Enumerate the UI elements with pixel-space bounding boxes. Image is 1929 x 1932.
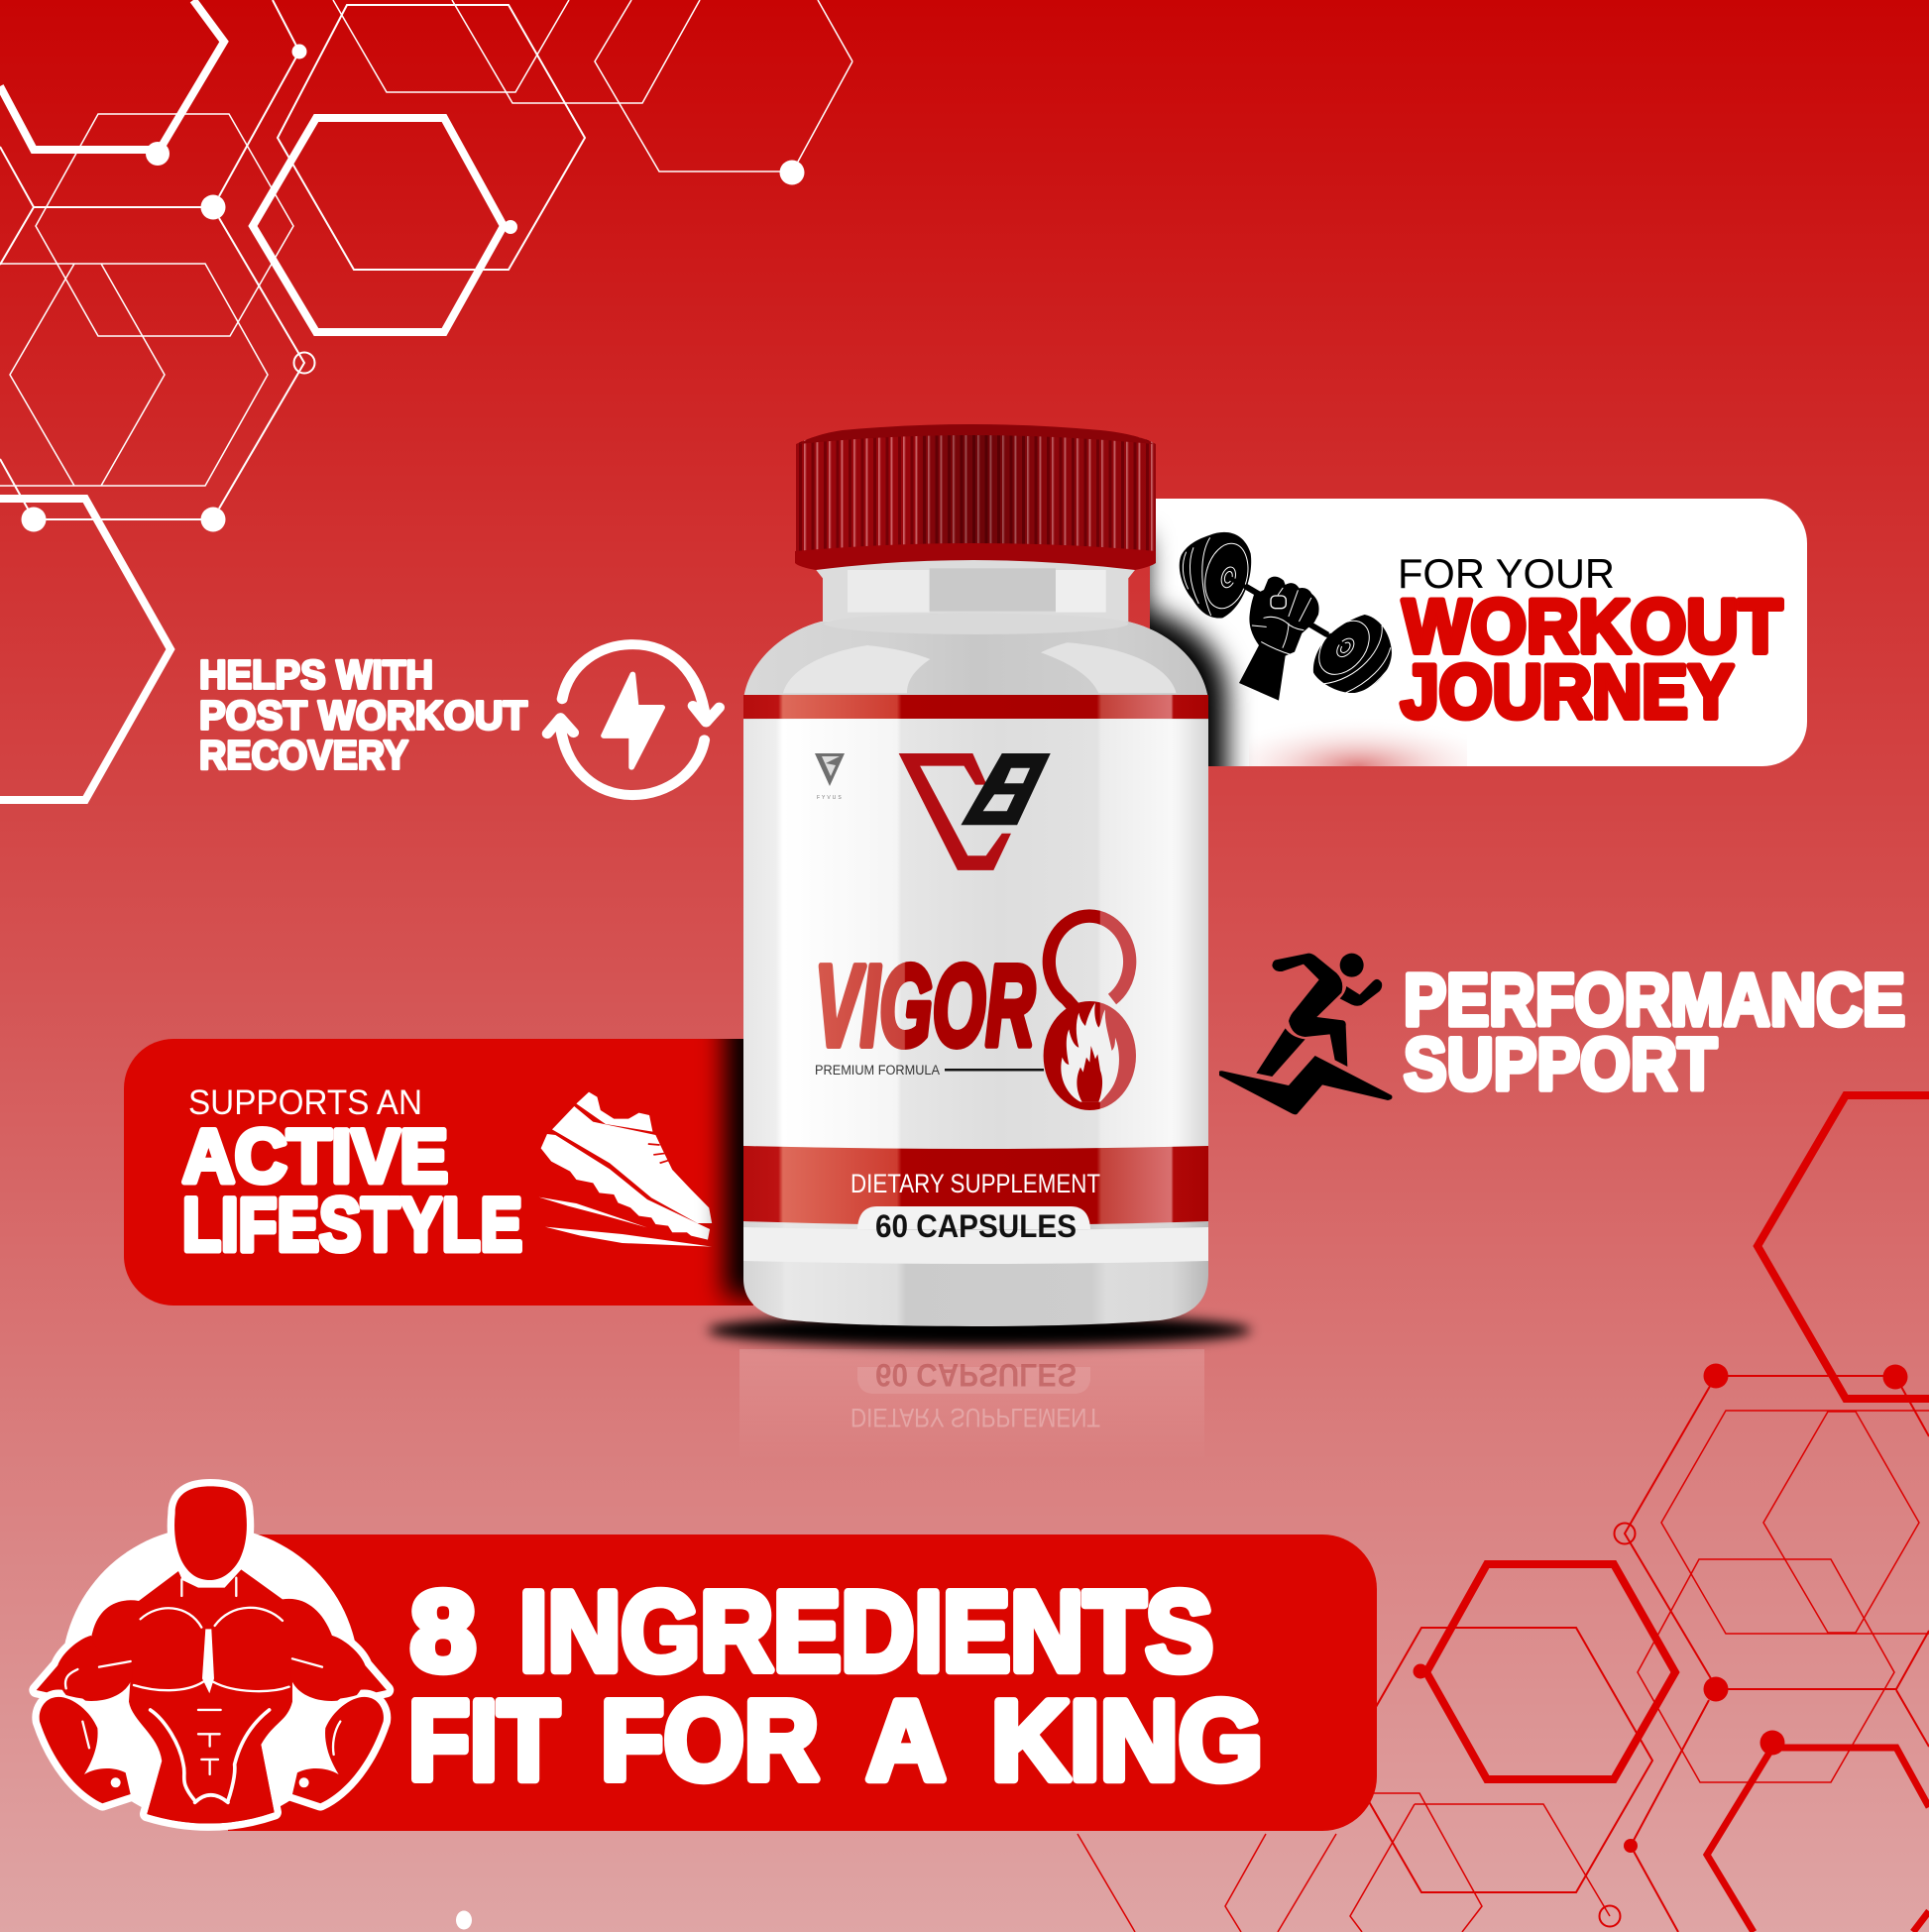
bottle shadow on panels	[743, 555, 1208, 1279]
lower label band	[743, 1146, 1208, 1225]
heading: 8 ingredients fit for a king: 8	[410, 1569, 476, 1695]
icon: runner	[1219, 954, 1392, 1114]
heading: 8 ingredients fit for a king: INGREDIENTS	[519, 1569, 1213, 1695]
hexagon network: top left	[0, 0, 852, 800]
heading: 8 ingredients fit for a king: KING	[991, 1678, 1263, 1804]
bottle	[743, 424, 1208, 1326]
text: performance support: SUPPORT	[1404, 1023, 1717, 1105]
text: helps with post workout recovery: HELPS WITH	[199, 652, 433, 698]
text: supports an active lifestyle: ACTIVE	[182, 1114, 448, 1199]
bottle reflection: DIETARY SUPPLEMENT	[851, 1403, 1100, 1432]
man torso	[57, 1569, 366, 1824]
text: helps with post workout recovery	[199, 652, 527, 777]
ground shadow	[708, 1313, 1251, 1347]
text: supports an active lifestyle: SUPPORTS AN	[188, 1083, 422, 1122]
bottle neck	[816, 560, 1135, 627]
small brand logo	[815, 753, 845, 801]
text: for your workout journey: WORKOUT	[1403, 585, 1782, 669]
V8 logo	[899, 753, 1051, 870]
text: for your workout journey: FOR YOUR	[1398, 550, 1615, 597]
text: helps with post workout recovery: RECOVERY	[199, 732, 408, 777]
bottle body	[743, 614, 1208, 1326]
heading: 8 ingredients fit for a king: FOR	[601, 1678, 819, 1804]
capsule count label: 60 CAPSULES	[875, 1208, 1077, 1244]
bottle reflection: 60 CAPSULES	[875, 1357, 1077, 1393]
text: supports an active lifestyle: LIFESTYLE	[182, 1184, 522, 1267]
icon: fist holding dumbbell	[1180, 532, 1392, 701]
dietary supplement label: DIETARY SUPPLEMENT	[851, 1169, 1100, 1198]
bottle shoulder	[744, 614, 1207, 696]
kettlebell eight with flame	[1044, 916, 1136, 1110]
icon: energy recovery cycle	[547, 644, 720, 795]
capsule count tab	[857, 1206, 1090, 1229]
hexagon network: bottom right	[1078, 1095, 1929, 1932]
bottle label	[743, 718, 1208, 1149]
text: helps with post workout recovery: POST WORKOUT	[199, 692, 527, 738]
cap	[795, 424, 1156, 570]
small white dot	[456, 1911, 472, 1929]
heading: 8 ingredients fit for a king	[408, 1569, 1263, 1804]
small brand logo: FYVUS	[817, 795, 844, 801]
VIGOR wordmark: VIGOR	[815, 942, 1035, 1071]
text: for your workout journey	[1398, 550, 1782, 735]
heading: 8 ingredients fit for a king: A	[866, 1678, 946, 1804]
panel: active lifestyle	[124, 1039, 753, 1306]
text: performance support	[1404, 959, 1905, 1105]
icon: muscular man badge	[37, 1486, 387, 1824]
premium formula tagline: PREMIUM FORMULA	[815, 1063, 940, 1078]
bottle reflection	[739, 1349, 1204, 1461]
heading: 8 ingredients fit for a king: FIT	[408, 1678, 559, 1804]
top label band	[743, 695, 1208, 719]
panel: workout journey	[1150, 499, 1807, 766]
man muscle lines	[202, 1629, 214, 1693]
text: for your workout journey: JOURNEY	[1401, 650, 1734, 735]
panel: 8 ingredients banner	[228, 1534, 1377, 1831]
text: supports an active lifestyle	[182, 1083, 522, 1267]
icon: running shoe	[539, 1092, 712, 1247]
